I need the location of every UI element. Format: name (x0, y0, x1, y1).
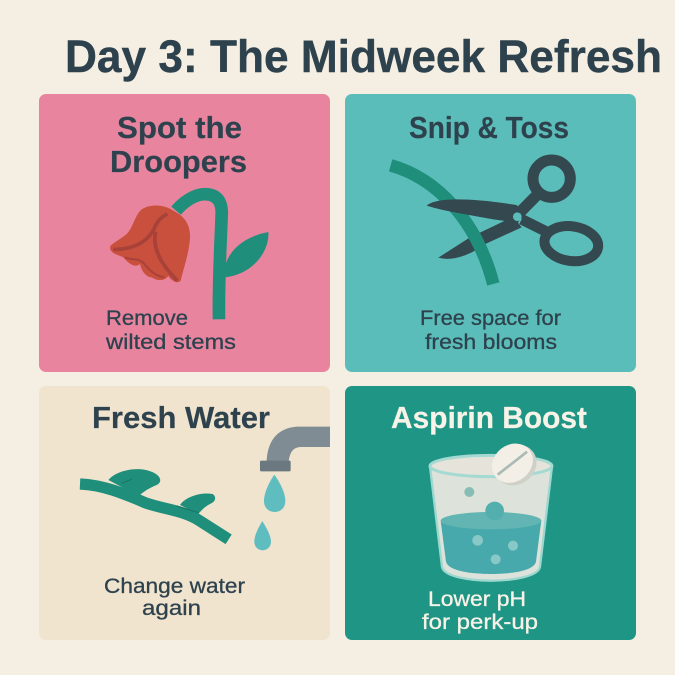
body text: change water again: again (142, 597, 201, 620)
body text: lower ph for perk-up: for perk-up (422, 611, 538, 634)
body text: free space for fresh blooms: fresh blooms (425, 331, 557, 354)
body text: change water again (104, 575, 245, 620)
body text: remove wilted stems (105, 307, 236, 354)
heading: spot the droopers: Spot the (117, 110, 242, 145)
heading: fresh water: Fresh Water (92, 400, 270, 435)
heading: snip and toss: Snip & Toss (409, 110, 569, 145)
body text: change water again: Change water (104, 575, 245, 598)
aspirin tablet (484, 434, 545, 494)
icon: glass with aspirin tablet (430, 434, 552, 581)
heading: spot the droopers (110, 110, 247, 179)
panel: aspirin boost (345, 386, 636, 640)
body text: lower ph for perk-up (422, 588, 538, 634)
body text: remove wilted stems: Remove (106, 307, 188, 330)
body text: free space for fresh blooms (420, 307, 561, 354)
icon: water drops (254, 475, 285, 550)
icon: faucet (260, 427, 330, 471)
body text: lower ph for perk-up: Lower pH (428, 588, 526, 611)
bubbles (464, 487, 518, 564)
icon: scissors cutting stem (391, 160, 600, 284)
icon: cut stem with leaves (80, 469, 229, 539)
body text: free space for fresh blooms: Free space for (420, 307, 561, 330)
heading: spot the droopers: Droopers (110, 144, 247, 179)
panel: fresh water (39, 386, 330, 640)
panel: spot the droopers (39, 94, 330, 372)
title: Day 3: The Midweek Refresh (65, 31, 662, 82)
heading: aspirin boost: Aspirin Boost (391, 400, 587, 435)
icon: wilted tulip (110, 194, 268, 319)
body text: remove wilted stems: wilted stems (105, 331, 236, 354)
panel: snip and toss (345, 94, 636, 372)
